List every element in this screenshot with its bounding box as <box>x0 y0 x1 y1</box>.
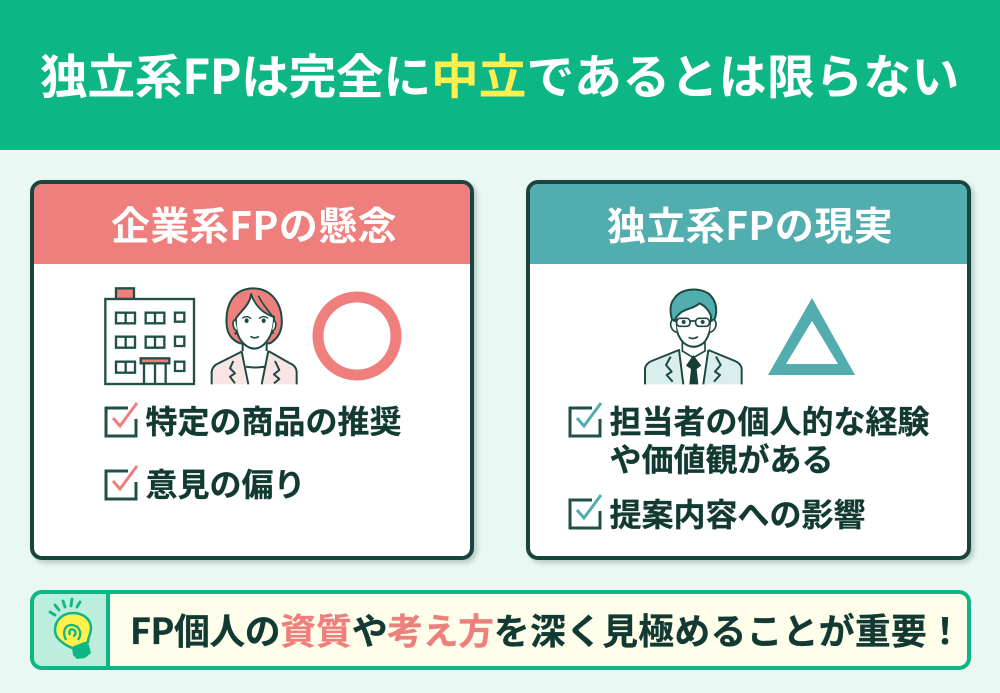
check item: personal experience and values <box>568 397 930 480</box>
icon: checkbox <box>104 465 138 500</box>
icon: triangle mark <box>768 298 855 375</box>
check item: specific product recommendation: 特定の商品の推奨 <box>146 397 402 443</box>
panel: corporate FP <box>30 180 474 560</box>
icon: man in suit with glasses <box>644 288 743 384</box>
check item: biased opinion: 意見の偏り <box>146 460 306 506</box>
icon: office building <box>104 287 196 386</box>
callout: conclusion <box>30 590 971 670</box>
panel: independent FP <box>526 180 971 560</box>
icon: woman in suit <box>210 287 298 384</box>
check item: personal experience and values: 担当者の個人的な経験 <box>610 397 930 443</box>
icon panel: light bulb <box>34 594 106 666</box>
icon: light bulb <box>48 598 92 659</box>
panel heading: independent FP <box>530 184 967 264</box>
panel heading: independent FP: 独立系FPの現実 <box>607 196 893 252</box>
title: 独立系FPは完全に中立であるとは限らない <box>40 39 960 108</box>
icon: checkbox <box>568 402 602 438</box>
divider <box>106 594 110 666</box>
panel heading: corporate FP <box>34 184 470 264</box>
icon: checkbox <box>104 402 138 438</box>
check item: influence on proposal: 提案内容への影響 <box>610 490 866 536</box>
callout text: FP個人の資質や考え方を深く見極めることが重要！ <box>130 603 963 655</box>
icon: circle mark <box>312 292 402 380</box>
icon: checkbox <box>568 494 602 530</box>
panel heading: corporate FP: 企業系FPの懸念 <box>111 196 397 252</box>
title banner <box>0 0 1000 150</box>
check item: personal experience and values: や価値観がある <box>610 434 834 480</box>
